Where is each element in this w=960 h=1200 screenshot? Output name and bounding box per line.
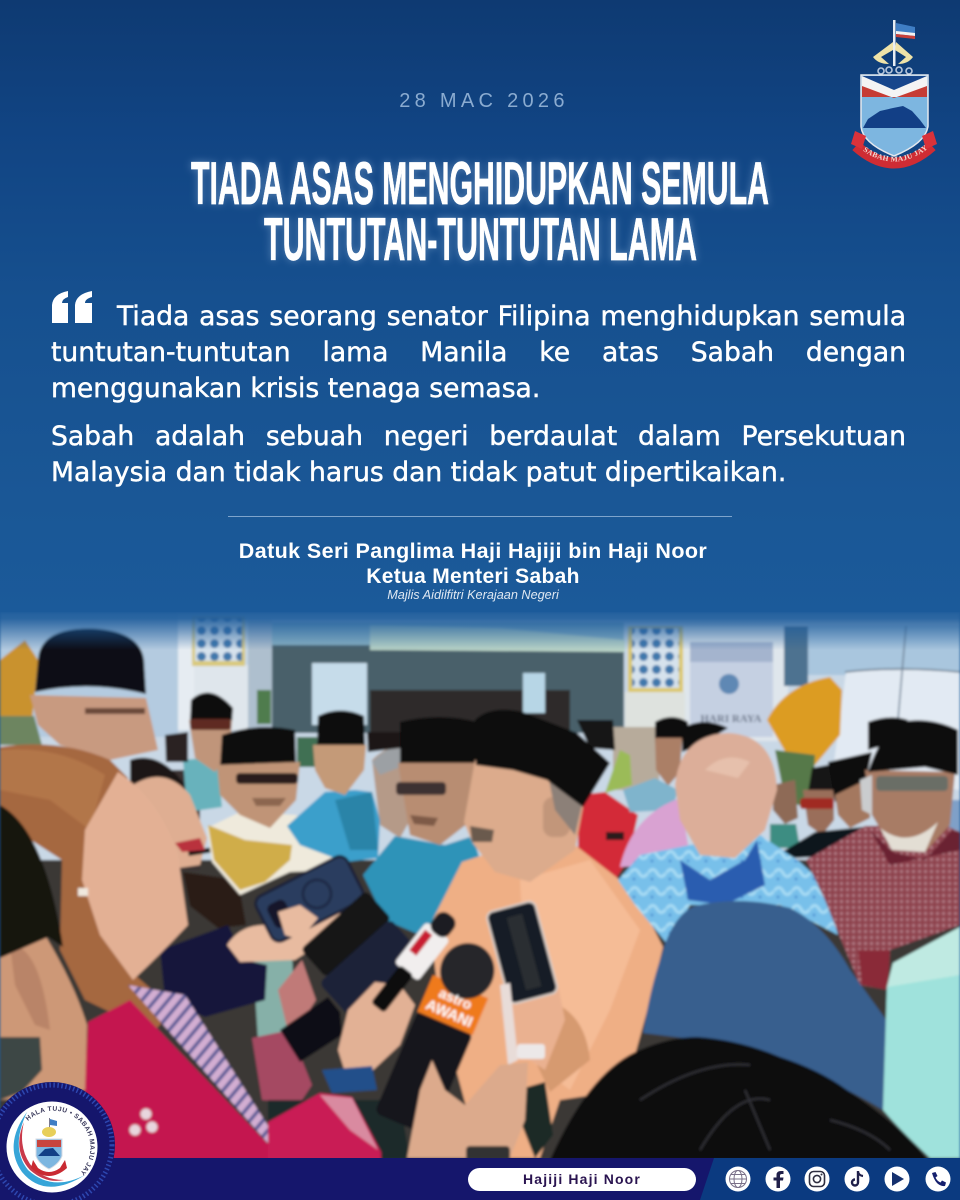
name pill: Hajiji Haji Noor	[523, 1171, 641, 1187]
second journalist behind	[130, 758, 254, 928]
state crest top right	[851, 20, 937, 168]
date: 28 MAC 2026	[399, 90, 569, 112]
name pill	[468, 1168, 696, 1191]
attribution: Majlis Aidilfitri Kerajaan Negeri	[387, 588, 559, 602]
quote text: Malaysia dan tidak harus dan tidak patut dipertikaikan.	[51, 457, 786, 488]
man in white and gold shirt	[207, 727, 333, 895]
attribution: Datuk Seri Panglima Haji Hajiji bin Haji Noor	[239, 539, 707, 563]
phones, hands and microphones: astro	[437, 985, 474, 1013]
man in salmon shirt (main speaker)	[430, 710, 663, 1158]
building backdrop	[0, 612, 960, 882]
man with glasses in teal shirt	[363, 717, 480, 935]
quote text: Sabah adalah sebuah negeri berdaulat dalam Persekutuan	[51, 421, 906, 452]
lower-left layers behind the phones	[252, 955, 410, 1160]
phones, hands and microphones	[227, 853, 565, 1160]
journalist's black hair in foreground	[550, 1037, 928, 1160]
woman in blue hijab	[643, 901, 903, 1110]
phones, hands and microphones: AWANI	[423, 996, 475, 1031]
man in blue shirt	[287, 710, 380, 862]
icon: quotation mark	[52, 291, 92, 323]
quote text: Tiada asas seorang senator Filipina menghidupkan semula	[117, 301, 906, 332]
icon: facebook	[766, 1166, 790, 1192]
photo top fade into blue	[0, 605, 960, 650]
person in turquoise at right	[883, 927, 960, 1158]
icon: phone	[926, 1166, 950, 1192]
man in maroon check shirt at right	[806, 720, 960, 990]
footer bar	[0, 1158, 960, 1200]
photo: press scrum with Chief Minister	[0, 613, 960, 1158]
bald man in light blue batik	[618, 733, 838, 945]
top-left man in songkok	[30, 628, 158, 760]
icon: tiktok	[844, 1166, 870, 1192]
quote text: tuntutan-tuntutan lama Manila ke atas Sabah dengan	[51, 337, 906, 368]
title	[188, 150, 772, 273]
icon: globe	[726, 1166, 750, 1192]
attribution: Ketua Menteri Sabah	[366, 565, 580, 588]
foreground man at left edge	[0, 805, 87, 1100]
building backdrop: HARI RAYA	[700, 713, 762, 725]
attribution	[239, 539, 707, 602]
quote text	[51, 301, 906, 488]
journalist in red dress with auburn hair	[0, 744, 381, 1160]
icon: youtube play	[884, 1166, 910, 1192]
divider	[228, 516, 732, 517]
quote text: menggunakan krisis tenaga semasa.	[51, 373, 540, 404]
social icons row	[726, 1166, 950, 1192]
crowd: back row	[0, 693, 960, 1160]
icon: instagram	[804, 1166, 830, 1192]
logo badge: Hala Tuju Sabah Maju Jaya	[0, 1082, 115, 1200]
